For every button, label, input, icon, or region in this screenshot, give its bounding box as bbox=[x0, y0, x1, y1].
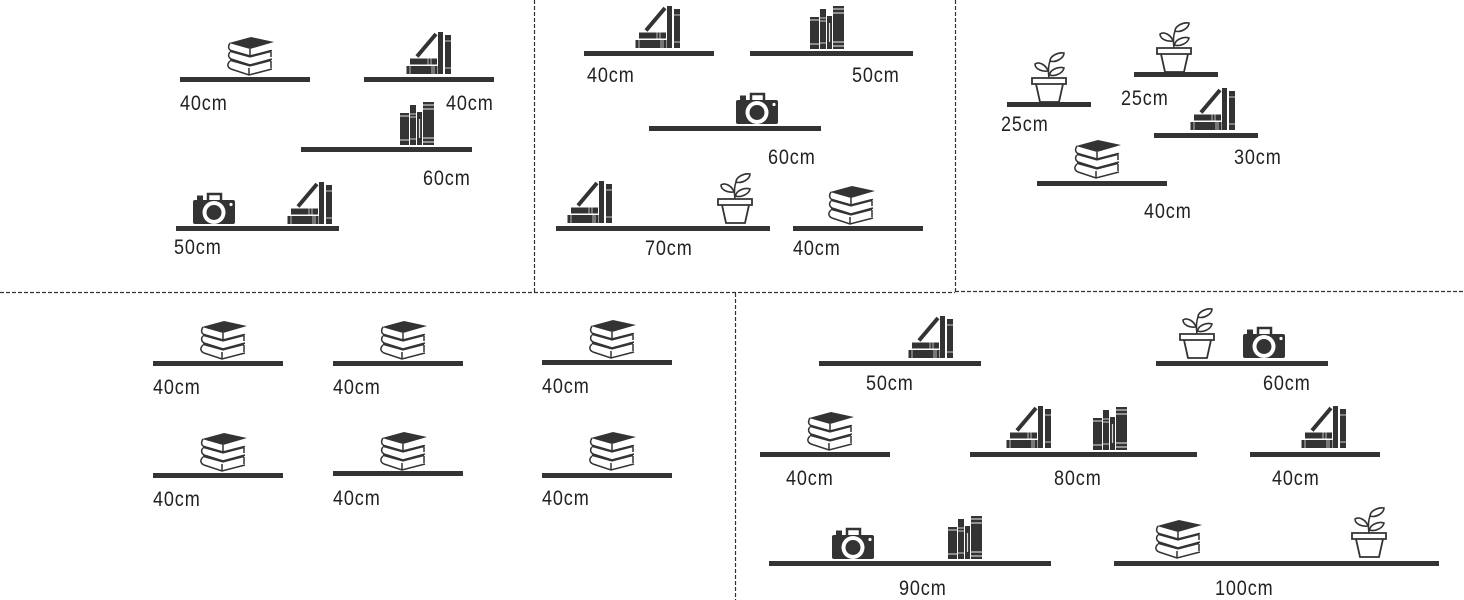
shelf: 40cm row 2 middle bbox=[333, 432, 463, 510]
shelf: 40cm with books: 40cm bbox=[793, 237, 841, 260]
shelf: 100cm with books and plant: 100cm bbox=[1215, 577, 1273, 600]
shelf: 40cm row 1 middle bbox=[333, 321, 463, 399]
shelf: 90cm with camera and upright books: 90cm bbox=[899, 577, 947, 600]
shelf: 40cm row 1 right: 40cm bbox=[542, 375, 590, 398]
panel: top-right layout bbox=[1001, 23, 1282, 223]
shelf: 40cm row 2 left bbox=[153, 433, 283, 511]
shelf: 60cm with camera bbox=[649, 94, 821, 169]
shelf: 40cm with books: 40cm bbox=[786, 467, 834, 490]
shelf: 30cm with leaning books: 30cm bbox=[1234, 146, 1282, 169]
shelf: 40cm with books bbox=[180, 37, 310, 115]
shelf: 60cm with plant and camera bbox=[1156, 309, 1328, 395]
shelf: 40cm with books bbox=[793, 186, 923, 260]
panel: bottom-right layout bbox=[760, 309, 1439, 600]
panel: bottom-left layout bbox=[153, 320, 672, 511]
shelf: 70cm with books and plant bbox=[556, 174, 770, 260]
shelf: 40cm row 1 left bbox=[153, 321, 283, 399]
shelf: 40cm with leaning books bbox=[584, 6, 714, 87]
shelf: 30cm with leaning books bbox=[1154, 88, 1282, 169]
panel: top-left layout bbox=[174, 32, 494, 259]
shelf: 40cm with books bbox=[1037, 140, 1192, 223]
shelf: 90cm with camera and upright books bbox=[769, 516, 1051, 600]
shelf: 80cm with leaning and upright books bbox=[970, 406, 1197, 490]
shelf: 40cm with books bbox=[760, 412, 890, 490]
shelf: 25cm with plant, upper: 25cm bbox=[1121, 87, 1169, 110]
shelf: 40cm with leaning books: 40cm bbox=[446, 92, 494, 115]
shelf: 40cm row 1 left: 40cm bbox=[153, 376, 201, 399]
shelf: 40cm row 1 middle: 40cm bbox=[333, 376, 381, 399]
shelf: 40cm with leaning books bbox=[364, 32, 494, 115]
shelf: 50cm with camera and books bbox=[174, 182, 339, 259]
shelf: 40cm row 2 right: 40cm bbox=[542, 487, 590, 510]
shelf: 100cm with books and plant bbox=[1114, 508, 1439, 600]
shelf: 40cm with leaning books: 40cm bbox=[587, 64, 635, 87]
shelf: 40cm row 1 right bbox=[542, 320, 672, 398]
shelf: 40cm row 2 left: 40cm bbox=[153, 488, 201, 511]
shelf: 50cm with upright books: 50cm bbox=[852, 64, 900, 87]
shelf: 50cm with leaning books: 50cm bbox=[866, 372, 914, 395]
shelf: 40cm with leaning books: 40cm bbox=[1272, 467, 1320, 490]
shelf: 60cm with plant and camera: 60cm bbox=[1263, 372, 1311, 395]
shelf: 60cm with upright books: 60cm bbox=[423, 167, 471, 190]
shelf: 60cm with upright books bbox=[301, 102, 472, 190]
shelf: 40cm row 2 right bbox=[542, 432, 672, 510]
shelf: 25cm with plant: 25cm bbox=[1001, 113, 1049, 136]
shelf: 40cm with books: 40cm bbox=[180, 92, 228, 115]
shelf: 25cm with plant, upper bbox=[1121, 23, 1218, 110]
shelf: 50cm with leaning books bbox=[819, 316, 981, 395]
panel: top-middle layout bbox=[556, 6, 923, 260]
shelf: 40cm with leaning books bbox=[1250, 406, 1380, 490]
shelf: 80cm with leaning and upright books: 80cm bbox=[1054, 467, 1102, 490]
shelf: 40cm row 2 middle: 40cm bbox=[333, 487, 381, 510]
shelf: 60cm with camera: 60cm bbox=[768, 146, 816, 169]
shelf: 70cm with books and plant: 70cm bbox=[645, 237, 693, 260]
shelf: 40cm with books: 40cm bbox=[1144, 200, 1192, 223]
shelf: 50cm with upright books bbox=[750, 6, 913, 87]
shelf: 25cm with plant bbox=[1001, 53, 1091, 136]
shelf: 50cm with camera and books: 50cm bbox=[174, 236, 222, 259]
